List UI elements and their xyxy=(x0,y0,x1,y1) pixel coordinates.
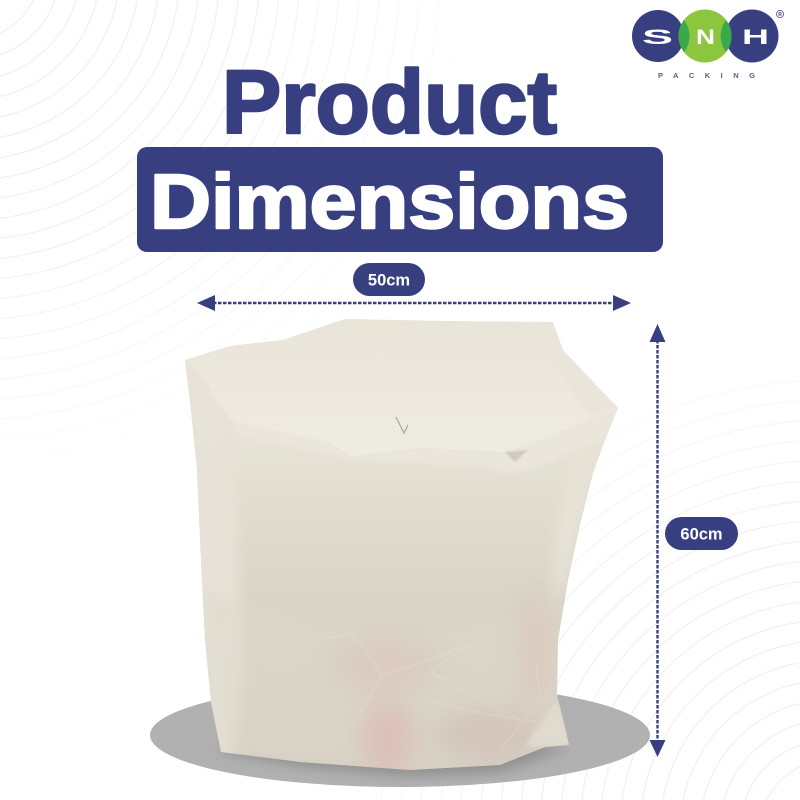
height arrow xyxy=(650,324,666,757)
crease at rim xyxy=(505,450,528,462)
bag right inner wall xyxy=(537,322,618,416)
height label: 60cm xyxy=(665,517,738,550)
logo: SNH Packing: R xyxy=(778,12,782,18)
width label: 50cm: 50cm xyxy=(368,272,410,290)
printed mark inside bag xyxy=(396,417,408,433)
width label: 50cm xyxy=(353,263,425,296)
ground shadow ellipse xyxy=(150,694,650,787)
bag creases xyxy=(514,717,525,720)
logo: SNH Packing: PACKING xyxy=(658,71,755,80)
logo: SNH Packing: H xyxy=(742,26,769,49)
product photo: white bag xyxy=(175,319,625,780)
bag left side fold xyxy=(187,378,239,754)
logo: SNH Packing: N xyxy=(696,26,715,49)
bag right edge highlight xyxy=(556,518,572,586)
height label: 60cm: 60cm xyxy=(680,526,723,544)
logo: SNH Packing xyxy=(632,10,784,80)
heading banner: Dimensions xyxy=(137,147,663,252)
bag lower hem band xyxy=(205,580,569,770)
pink contents showing through xyxy=(348,612,548,770)
heading banner: Dimensions: Dimensions xyxy=(150,159,629,245)
bag left inner wall xyxy=(185,360,233,445)
title: Product: Product xyxy=(222,53,557,153)
width arrow xyxy=(197,295,631,311)
bag bottom right corner fold xyxy=(528,708,566,746)
bag interior xyxy=(292,429,544,456)
bag front rim fold xyxy=(233,408,618,473)
logo: SNH Packing: S xyxy=(642,26,673,49)
